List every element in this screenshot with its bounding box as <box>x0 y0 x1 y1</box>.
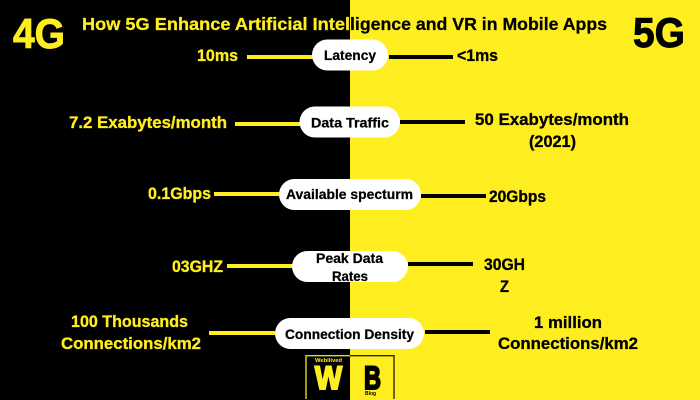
connector: peak rate right <box>408 262 473 266</box>
title <box>82 14 607 34</box>
connector: spectrum right <box>421 194 486 198</box>
connector: latency right <box>389 55 453 59</box>
label pill: peak data rates: Rates <box>332 269 368 284</box>
label pill: spectrum: Available specturm <box>286 187 413 202</box>
panel: 5G yellow half <box>350 0 700 400</box>
logo frame left <box>306 356 350 399</box>
4G density value: Connections/km2 <box>61 335 201 353</box>
title: ligence and VR in Mobile Apps <box>350 14 607 34</box>
panel: 4G black half <box>0 0 350 400</box>
label pill: spectrum <box>279 179 421 210</box>
row: peak data rates <box>172 251 525 296</box>
4G latency value: 10ms <box>197 47 238 65</box>
heading: 4G: 4G <box>13 10 65 57</box>
5G peak rate value: 30GH <box>484 256 525 274</box>
connector: peak rate left <box>227 264 293 268</box>
4G density value: 100 Thousands <box>71 313 188 331</box>
logo letter B: B <box>364 360 381 396</box>
connector: density right <box>425 330 490 334</box>
5G spectrum value: 20Gbps <box>489 188 546 206</box>
5G data traffic value: (2021) <box>529 133 576 151</box>
label pill: peak data rates <box>292 251 408 284</box>
5G peak rate value: Z <box>500 278 509 296</box>
connector: data traffic left <box>235 122 300 126</box>
4G data traffic value: 7.2 Exabytes/month <box>69 114 227 132</box>
connector: data traffic right <box>400 120 465 124</box>
label pill: peak data rates: Peak Data <box>316 251 384 266</box>
row: available spectrum <box>148 179 546 210</box>
heading: 5G: 5G <box>633 9 685 56</box>
label pill: latency <box>312 40 388 70</box>
label pill: data traffic <box>300 106 400 138</box>
label pill: connection density: Connection Density <box>285 327 414 342</box>
logo frame right <box>350 356 394 399</box>
logo caption: Webilived: Webilived <box>315 358 342 364</box>
4G density value <box>61 313 201 353</box>
connector: density left <box>209 331 275 335</box>
row: latency <box>197 40 498 70</box>
label pill: connection density <box>275 318 424 349</box>
label pill: data traffic: Data Traffic <box>311 116 390 130</box>
logo letter W: W <box>315 360 343 396</box>
5G density value: 1 million <box>534 314 602 332</box>
5G density value: Connections/km2 <box>498 335 638 353</box>
5G latency value: <1ms <box>457 47 498 65</box>
title: How 5G Enhance Artificial Intel <box>82 14 350 34</box>
4G peak rate value: 03GHZ <box>172 258 223 276</box>
4G spectrum value: 0.1Gbps <box>148 185 211 203</box>
5G data traffic value <box>475 111 629 151</box>
row: connection density <box>61 313 638 353</box>
5G density value <box>498 314 638 353</box>
label pill: latency: Latency <box>324 48 376 63</box>
connector: spectrum left <box>214 192 280 196</box>
logo caption: Blog: Blog <box>365 391 376 397</box>
5G peak rate value <box>484 256 525 296</box>
5G data traffic value: 50 Exabytes/month <box>475 111 629 129</box>
row: data traffic <box>69 106 629 151</box>
logo: WebBlog badge <box>306 356 394 399</box>
connector: latency left <box>247 55 313 59</box>
